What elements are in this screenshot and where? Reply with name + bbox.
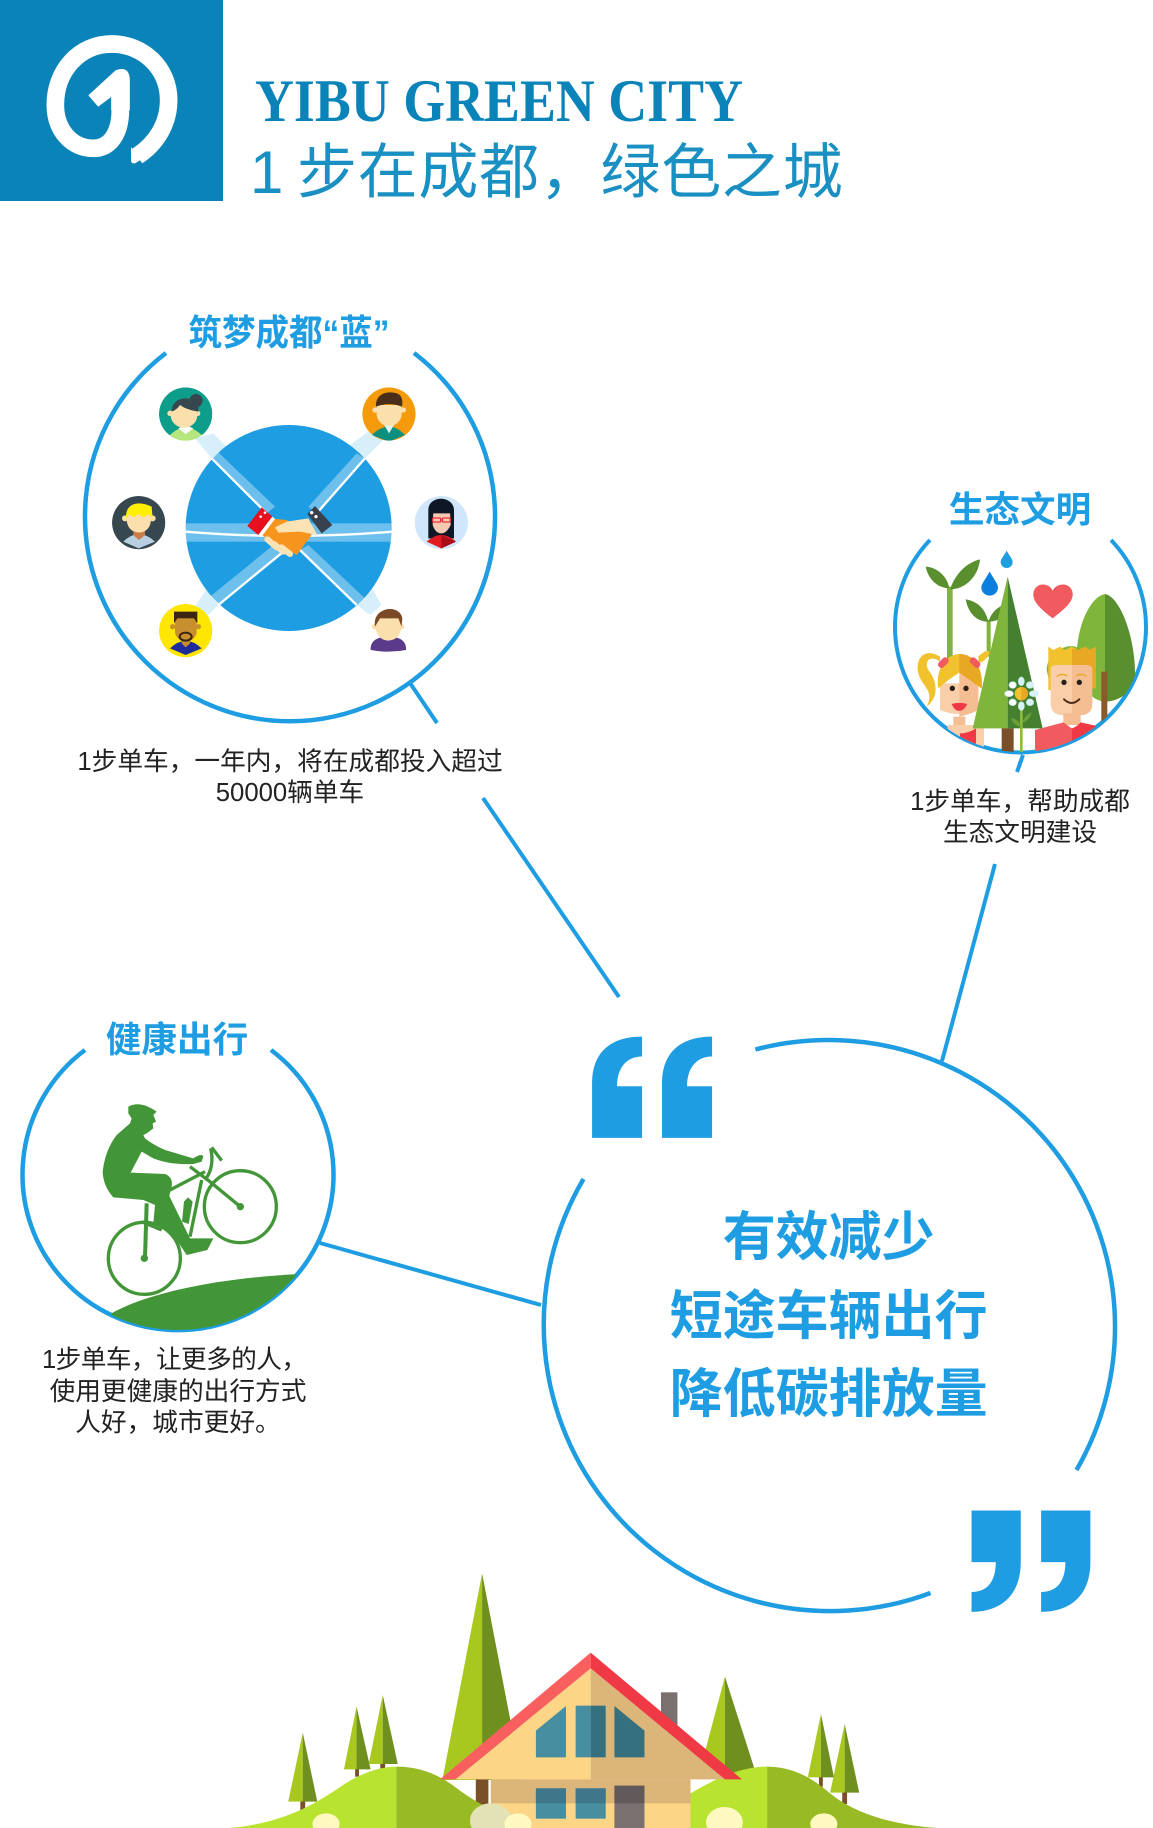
flower (1020, 703, 1023, 753)
circle outline (22, 1050, 333, 1330)
girl (918, 653, 940, 707)
centre tree (973, 577, 1008, 728)
header: logo and titles (0, 0, 843, 206)
panel: central quote (544, 1037, 1115, 1612)
caption (910, 787, 1130, 847)
caption: 1步单车，让更多的人， (42, 1345, 307, 1374)
circle outline (895, 540, 1146, 752)
title chinese: 1 (250, 139, 283, 206)
sprouts (947, 587, 953, 660)
avatar: woman with bun (159, 387, 212, 443)
avatar: bearded man (159, 604, 212, 657)
illustration: children and trees (918, 551, 1135, 758)
handshake globe illustration (186, 425, 392, 631)
caption: 1步单车，帮助成都 (910, 787, 1130, 816)
hills (229, 1767, 937, 1828)
illustration: cyclist on hill (102, 1104, 298, 1330)
quote text: 短途车辆出行 (670, 1287, 988, 1346)
caption: 人好，城市更好。 (75, 1408, 281, 1437)
avatar: man on orange (362, 387, 416, 442)
title english: YIBU GREEN CITY (255, 68, 743, 134)
trees (288, 1573, 859, 1812)
panel: healthy travel (22, 1020, 340, 1437)
heading: 生态文明 (949, 490, 1091, 530)
quote text: 降低碳排放量 (670, 1365, 988, 1424)
circle outline (85, 353, 495, 721)
circle outline (544, 1040, 1115, 1611)
closing quotation mark (972, 1510, 1090, 1612)
logo block (0, 0, 223, 201)
caption: 1步单车，一年内，将在成都投入超过 (77, 747, 503, 776)
caption: 50000辆单车 (216, 778, 364, 807)
panel: blue dream (77, 313, 503, 807)
avatar: man with brown hair (371, 609, 406, 652)
avatar: woman with red glasses (415, 496, 468, 549)
caption (77, 747, 503, 807)
handshake (247, 506, 332, 555)
panel: ecological civilisation (895, 490, 1146, 847)
avatar: blond man (112, 496, 165, 549)
caption: 使用更健康的出行方式 (50, 1377, 306, 1406)
right tree (1077, 594, 1105, 702)
heading: 筑梦成都“蓝” (188, 313, 390, 353)
connector lines (320, 683, 1023, 1305)
boy (1046, 646, 1078, 678)
quote text: 有效减少 (723, 1208, 935, 1267)
house (440, 1653, 742, 1828)
caption: 生态文明建设 (943, 818, 1097, 847)
illustration: house and trees (229, 1573, 937, 1828)
title chinese: 步在成都，绿色之城 (297, 139, 843, 206)
quote text (670, 1208, 988, 1424)
caption (42, 1345, 307, 1437)
heading: 健康出行 (106, 1020, 248, 1060)
opening quotation mark (592, 1037, 712, 1138)
